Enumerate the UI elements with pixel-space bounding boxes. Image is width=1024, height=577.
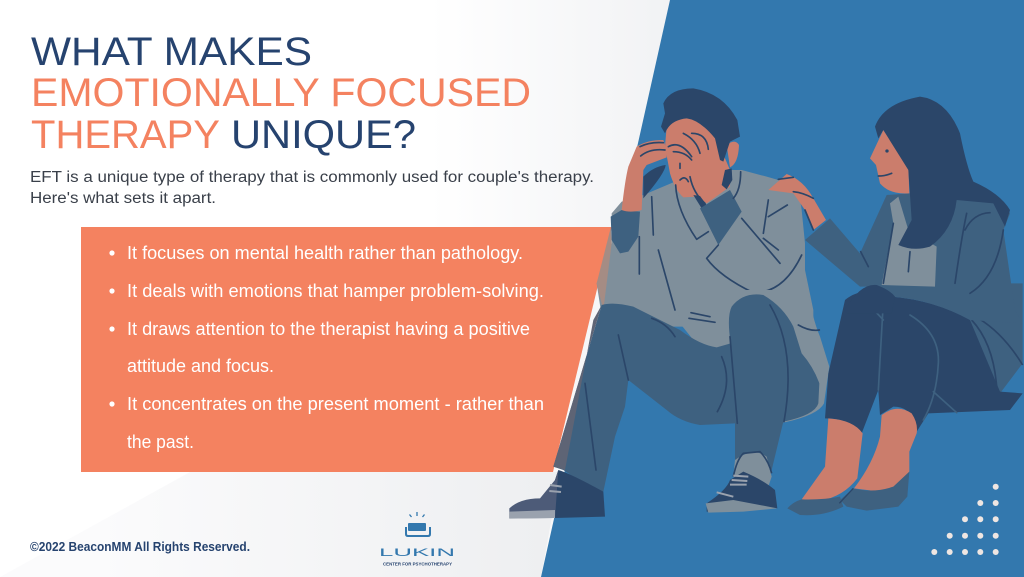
bullet list <box>109 243 544 452</box>
title: UNIQUE? <box>231 113 416 157</box>
decorative dot grid <box>931 484 999 555</box>
title: EMOTIONALLY FOCUSED <box>31 71 531 115</box>
bullet list: It deals with emotions that hamper problem-solving. <box>127 281 544 301</box>
intro paragraph: EFT is a unique type of therapy that is commonly used for couple's therapy. <box>30 169 594 186</box>
panel: orange list background <box>81 227 612 472</box>
bullet list: It concentrates on the present moment - rather than <box>127 394 544 414</box>
bullet list: the past. <box>127 432 194 452</box>
panel: blue background <box>541 0 1024 577</box>
bullet list: It focuses on mental health rather than pathology. <box>127 243 523 263</box>
illustration: seated woman <box>768 97 1023 515</box>
logo: Lukin Center for Psychotherapy: LUKIN <box>379 547 455 559</box>
title: THERAPY <box>31 113 220 157</box>
intro paragraph: Here's what sets it apart. <box>30 190 216 207</box>
title: WHAT MAKES <box>31 30 312 74</box>
copyright footer: ©2022 BeaconMM All Rights Reserved. <box>30 540 250 554</box>
logo: Lukin Center for Psychotherapy <box>379 512 455 566</box>
illustration: seated man <box>509 88 829 519</box>
bullet list: It draws attention to the therapist having a positive <box>127 319 530 339</box>
bullet list: attitude and focus. <box>127 356 274 376</box>
logo: Lukin Center for Psychotherapy: CENTER FOR PSYCHOTHERAPY <box>383 562 452 566</box>
title <box>31 30 531 157</box>
intro paragraph <box>30 169 594 207</box>
